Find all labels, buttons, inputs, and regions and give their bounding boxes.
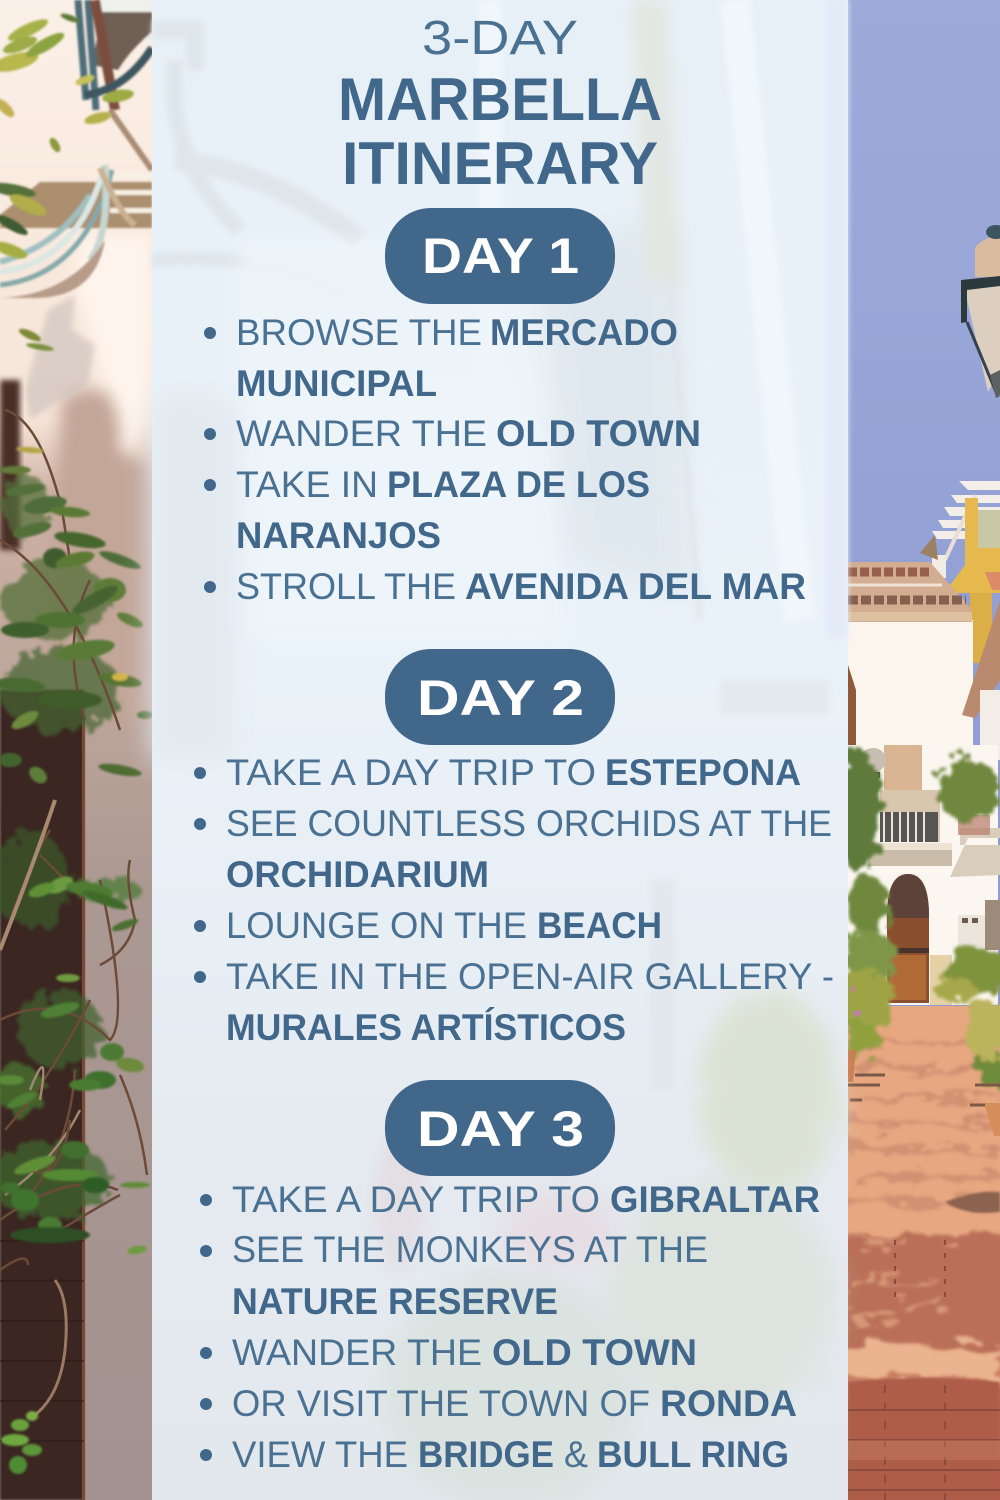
item: Old Town: [200, 1332, 697, 1373]
house wall and tile roof: [848, 562, 1000, 760]
item: Murales Artísticos: [194, 956, 834, 1048]
photo: right street with sky, lamp, houses and brick path: [836, 0, 1000, 1500]
title line: 3-DAY: 3-DAY: [422, 12, 578, 65]
item: Nature Reserve: NATURE RESERVE: [232, 1281, 558, 1322]
item: Beach: [194, 905, 662, 946]
item: Bridge and Bull Ring: &: [564, 1434, 588, 1475]
badge: Day 2: DAY 2: [417, 670, 584, 726]
item: Old Town: [204, 413, 701, 454]
item: Bridge and Bull Ring: VIEW THE: [232, 1434, 408, 1475]
title line: MARBELLA: MARBELLA: [338, 66, 662, 133]
item: Estepona: TAKE A DAY TRIP TO: [226, 752, 596, 793]
brick path with dappled shadows: [840, 1006, 1000, 1500]
item: Murales Artísticos: TAKE IN THE OPEN-AIR GALLERY -: [226, 956, 834, 997]
item: Avenida del Mar: [204, 566, 806, 607]
item: Bridge and Bull Ring: BRIDGE: [418, 1434, 554, 1475]
title line: ITINERARY: ITINERARY: [342, 130, 658, 197]
item: Plaza de los Naranjos: PLAZA DE LOS: [387, 464, 650, 505]
balcony house and door: [848, 745, 1000, 1005]
item: Gibraltar: TAKE A DAY TRIP TO: [232, 1179, 600, 1220]
item: Bridge and Bull Ring: [200, 1434, 789, 1475]
item: Old Town: WANDER THE: [236, 413, 487, 454]
item: Mercado Municipal: MERCADO: [490, 312, 678, 353]
item: Orchidarium: ORCHIDARIUM: [226, 854, 489, 895]
item: Estepona: [194, 752, 801, 793]
list: Day 3 activities: [200, 1179, 820, 1475]
item: Old Town: OLD TOWN: [492, 1332, 697, 1373]
badge: Day 2: [385, 649, 615, 745]
item: Old Town: OLD TOWN: [496, 413, 701, 454]
item: Plaza de los Naranjos: [204, 464, 650, 556]
item: Murales Artísticos: MURALES ARTÍSTICOS: [226, 1007, 626, 1048]
item: Orchidarium: [194, 803, 832, 895]
item: Mercado Municipal: [204, 312, 678, 404]
item: Old Town: WANDER THE: [232, 1332, 482, 1373]
item: Estepona: ESTEPONA: [605, 752, 801, 793]
item: Ronda: OR VISIT THE TOWN OF: [232, 1383, 650, 1424]
badge: Day 1: DAY 1: [422, 228, 579, 284]
item: Gibraltar: [200, 1179, 820, 1220]
pergola and yellow terrace: [920, 481, 1000, 663]
item: Orchidarium: SEE COUNTLESS ORCHIDS AT THE: [226, 803, 832, 844]
item: Avenida del Mar: STROLL THE: [236, 566, 456, 607]
item: Nature Reserve: SEE THE MONKEYS AT THE: [232, 1229, 708, 1270]
heading: itinerary title: [338, 12, 662, 197]
item: Plaza de los Naranjos: TAKE IN: [236, 464, 378, 505]
lamp: [961, 225, 1000, 398]
item: Nature Reserve: [200, 1229, 708, 1322]
item: Gibraltar: GIBRALTAR: [610, 1179, 820, 1220]
item: Bridge and Bull Ring: BULL RING: [597, 1434, 789, 1475]
badge: Day 3: [385, 1080, 615, 1176]
panel: translucent white itinerary panel over washed-out photo: [152, 0, 848, 1500]
item: Ronda: RONDA: [660, 1383, 797, 1424]
photo: left wall with climbing vines: [0, 0, 153, 1500]
item: Mercado Municipal: BROWSE THE: [236, 312, 482, 353]
item: Beach: LOUNGE ON THE: [226, 905, 527, 946]
vine mass: [0, 473, 141, 1220]
item: Beach: BEACH: [537, 905, 662, 946]
badge: Day 3: DAY 3: [417, 1101, 584, 1157]
item: Avenida del Mar: AVENIDA DEL MAR: [465, 566, 806, 607]
item: Mercado Municipal: MUNICIPAL: [236, 363, 437, 404]
item: Plaza de los Naranjos: NARANJOS: [236, 515, 441, 556]
list: Day 1 activities: [204, 312, 806, 607]
list: Day 2 activities: [194, 752, 834, 1048]
badge: Day 1: [385, 208, 615, 304]
trees and potted plants along the path: [836, 748, 1000, 1136]
